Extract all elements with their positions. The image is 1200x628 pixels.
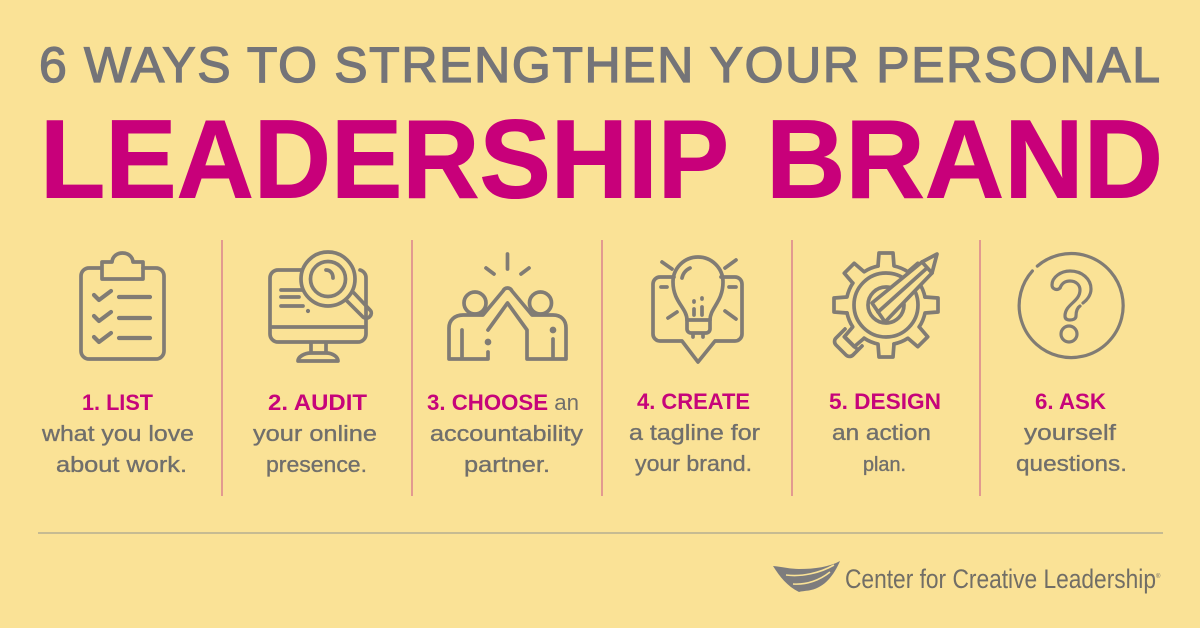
step 4 text: a tagline for: [629, 420, 760, 445]
icon: monitor with magnifier: [270, 252, 371, 361]
logo: Center for Creative Leadership: [773, 561, 1161, 594]
step 1 text: 1. LIST: [82, 390, 154, 415]
step 3 text: accountability: [430, 421, 583, 446]
step 2 text: your online: [253, 421, 377, 446]
step 5 text: [829, 389, 941, 476]
logo mark: swoosh: [773, 561, 840, 592]
title line 1: 6 WAYS TO STRENGTHEN YOUR PERSONAL: [39, 37, 1160, 93]
icon: gear with pencil: [834, 253, 938, 357]
logo wordmark: Center for Creative Leadership: [845, 564, 1156, 594]
step 6 text: 6. ASK: [1035, 389, 1106, 414]
registered mark: ®: [1156, 573, 1161, 580]
step 4 text: [629, 389, 760, 476]
step 5 text: an action: [832, 420, 931, 445]
panel: step 3 choose: [427, 254, 583, 477]
step 1 text: about work.: [56, 452, 187, 477]
step 6 text: yourself: [1024, 420, 1117, 445]
icon: clipboard checklist: [81, 253, 164, 359]
panel: step 1 list: [41, 253, 194, 477]
step 5 text: 5. DESIGN: [829, 389, 941, 414]
step 3 text: partner.: [464, 452, 550, 477]
step 2 text: [253, 390, 377, 477]
panel: step 6 ask: [1016, 254, 1127, 476]
panel: step 4 create: [629, 257, 760, 476]
title line 2: BRAND: [766, 98, 1163, 222]
step 3 text: [427, 390, 583, 477]
step 4 text: your brand.: [635, 451, 752, 476]
step 2 text: presence.: [266, 452, 367, 477]
step 5 text: plan.: [863, 453, 906, 476]
panel: step 5 design: [829, 253, 941, 476]
icon: light bulb in speech bubble: [653, 257, 742, 362]
icon: question mark in circle: [1019, 254, 1123, 358]
step 6 text: questions.: [1016, 451, 1127, 476]
title line 2: LEADERSHIP: [40, 98, 729, 222]
step 1 text: what you love: [41, 421, 194, 446]
title line 2: [40, 98, 1163, 222]
step 3 text: 3. CHOOSE an: [427, 390, 579, 415]
icon: two people high five: [449, 254, 566, 359]
step 2 text: 2. AUDIT: [268, 390, 368, 415]
panel: step 2 audit: [253, 252, 377, 477]
step 1 text: [41, 390, 194, 477]
step 4 text: 4. CREATE: [637, 389, 750, 414]
step 6 text: [1016, 389, 1127, 476]
title: [39, 37, 1163, 222]
